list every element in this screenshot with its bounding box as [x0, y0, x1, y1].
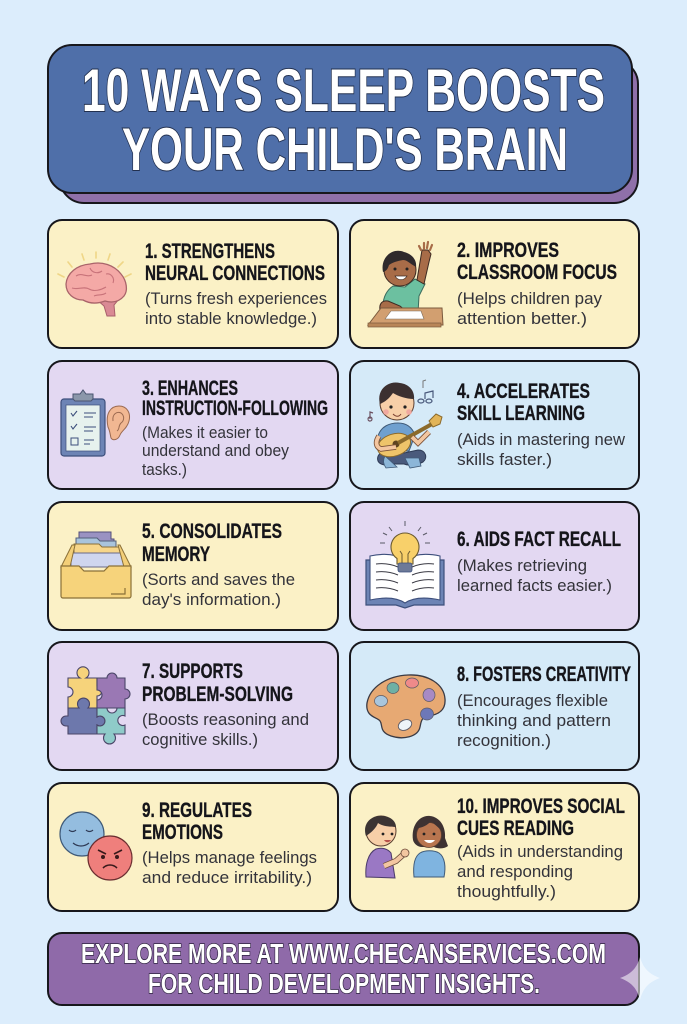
heading: card 4 [457, 380, 590, 425]
text: card 8 description: thinking and pattern [457, 711, 611, 730]
icon: puzzle pieces [61, 667, 130, 744]
text: card 4 description: skills faster.) [457, 450, 552, 469]
heading: card 1 [145, 240, 325, 285]
text: card 10 description: (Aids in understanding [457, 842, 623, 861]
panel: card 6 aids fact recall [350, 502, 639, 630]
text: card 9 description [142, 848, 317, 887]
heading: card 3: INSTRUCTION-FOLLOWING [142, 397, 328, 420]
text: card 7 description: cognitive skills.) [142, 730, 258, 749]
text: card 5 description: day's information.) [142, 590, 281, 609]
icon: calm and angry faces [60, 812, 132, 880]
panel: card 4 accelerates skill learning [350, 361, 639, 489]
text: card 1 description [145, 289, 327, 328]
heading: card 9: 9. REGULATES [142, 799, 252, 822]
icon: clipboard and ear [61, 390, 130, 456]
heading: card 3 [142, 377, 328, 420]
icon: paint palette [367, 675, 445, 738]
heading: card 9: EMOTIONS [142, 821, 223, 844]
heading: card 5: MEMORY [142, 543, 210, 566]
heading: card 1: 1. STRENGTHENS [145, 240, 275, 263]
panel: card 1 strengthens neural connections [48, 220, 338, 348]
panel: card 5 consolidates memory [48, 502, 338, 630]
footer banner [48, 933, 639, 1005]
panel: card 7 supports problem-solving [48, 642, 338, 770]
text: card 4 description [457, 430, 626, 469]
text: card 8 description: recognition.) [457, 731, 551, 750]
title banner [48, 45, 638, 203]
icon: child playing guitar [368, 380, 442, 468]
panel: card 9 regulates emotions [48, 783, 338, 911]
text: card 9 description: and reduce irritability.) [142, 868, 312, 887]
heading: card 10: 10. IMPROVES SOCIAL [457, 795, 625, 818]
heading: card 10 [457, 795, 625, 840]
panel: card 3 enhances instruction-following [48, 361, 338, 489]
text: card 4 description: (Aids in mastering new [457, 430, 626, 449]
icon: brain [58, 252, 131, 316]
text: card 1 description: (Turns fresh experiences [145, 289, 327, 308]
text: card 3 description: understand and obey [142, 441, 289, 460]
text: card 2 description [457, 289, 602, 328]
text: card 6 description: (Makes retrieving [457, 556, 587, 575]
text: card 8 description [457, 691, 611, 750]
heading: card 3: 3. ENHANCES [142, 377, 238, 400]
icon: sparkle [620, 957, 660, 1000]
heading: card 9 [142, 799, 252, 844]
heading: card 10: CUES READING [457, 817, 574, 840]
heading: card 2: CLASSROOM FOCUS [457, 261, 617, 284]
text: card 8 description: (Encourages flexible [457, 691, 608, 710]
text: card 6 description [457, 556, 612, 595]
heading: card 7: PROBLEM-SOLVING [142, 683, 293, 706]
heading: card 2: 2. IMPROVES [457, 239, 559, 262]
text: card 9 description: (Helps manage feelings [142, 848, 317, 867]
text: card 6 description: learned facts easier.) [457, 576, 612, 595]
text: card 2 description: attention better.) [457, 309, 587, 328]
heading: card 7: 7. SUPPORTS [142, 660, 243, 683]
heading: card 4: 4. ACCELERATES [457, 380, 590, 403]
footer banner: FOR CHILD DEVELOPMENT INSIGHTS. [148, 968, 540, 999]
text: card 10 description: thoughtfully.) [457, 882, 556, 901]
text: card 5 description [142, 570, 295, 609]
panel: card 8 fosters creativity [350, 642, 639, 770]
heading: card 7 [142, 660, 293, 706]
text: card 1 description: into stable knowledge.) [145, 309, 317, 328]
text: card 2 description: (Helps children pay [457, 289, 602, 308]
text: card 10 description: and responding [457, 862, 573, 881]
panel: card 10 improves social cues reading [350, 783, 639, 911]
heading: card 6: 6. AIDS FACT RECALL [457, 528, 621, 551]
heading: card 5: 5. CONSOLIDATES [142, 520, 282, 543]
heading: card 2 [457, 239, 617, 284]
text: card 3 description [142, 423, 289, 479]
icon: two children talking [365, 816, 448, 878]
text: card 3 description: (Makes it easier to [142, 423, 268, 442]
text: card 5 description: (Sorts and saves the [142, 570, 295, 589]
heading: card 5 [142, 520, 282, 566]
icon: open book with light bulb [366, 521, 444, 608]
panel: card 2 improves classroom focus [350, 220, 639, 348]
text: card 7 description [142, 710, 309, 749]
text: card 10 description [457, 842, 623, 901]
icon: child raising hand at desk [368, 242, 443, 327]
heading: card 4: SKILL LEARNING [457, 402, 585, 425]
text: card 7 description: (Boosts reasoning and [142, 710, 309, 729]
icon: file drawer [61, 532, 131, 598]
heading: card 1: NEURAL CONNECTIONS [145, 262, 325, 285]
text: card 3 description: tasks.) [142, 460, 187, 479]
